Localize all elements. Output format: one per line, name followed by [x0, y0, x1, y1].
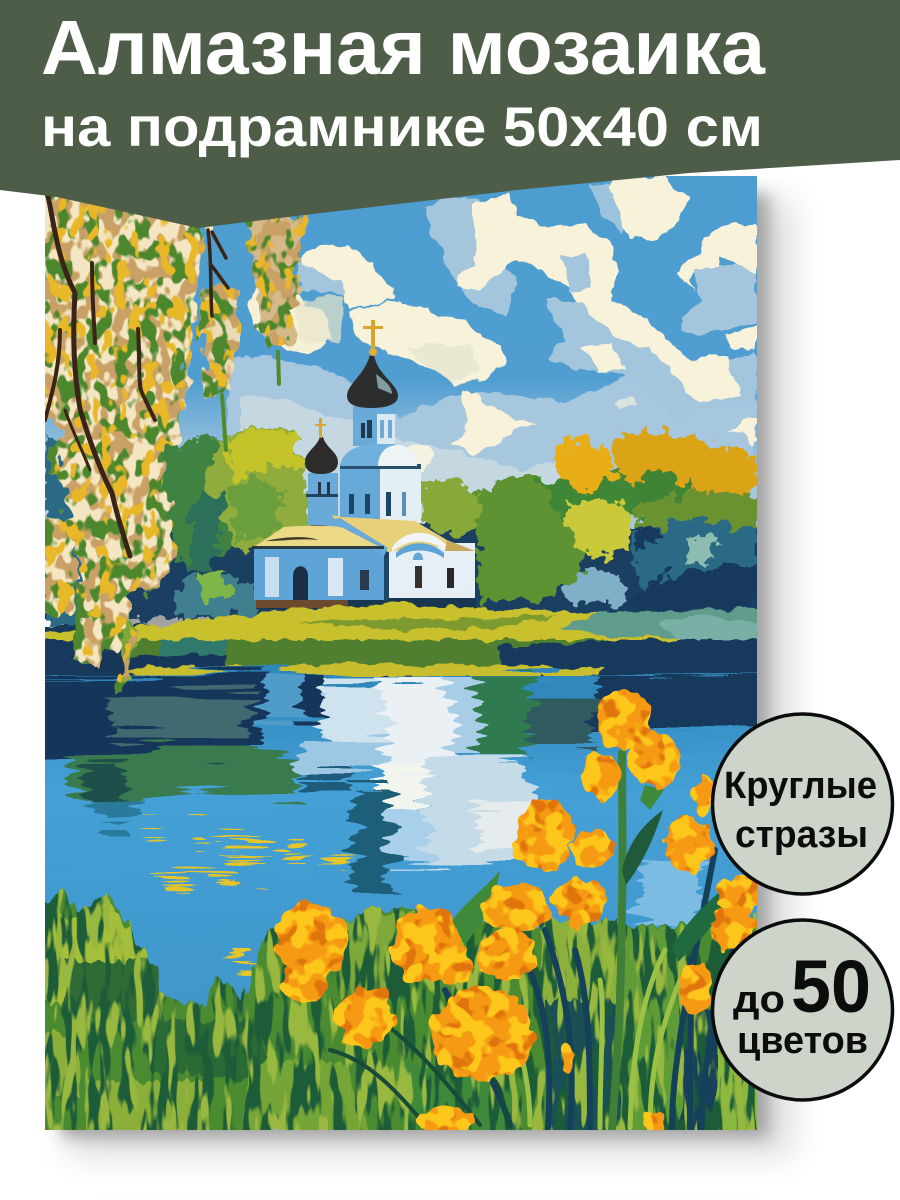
- lake with reflections: [30, 674, 770, 1014]
- badge: round rhinestones: [712, 714, 892, 894]
- badge: up to 50 colours: до: [733, 979, 785, 1021]
- clouds: [228, 176, 757, 530]
- yellow flowers: [274, 690, 760, 1134]
- title line 1: Алмазная мозаика: [41, 5, 766, 91]
- meadow and far bank: [40, 603, 762, 685]
- dark branches: [45, 196, 279, 556]
- background tree line: [40, 428, 762, 626]
- badge: round rhinestones: Круглые: [724, 765, 877, 807]
- badge: round rhinestones: стразы: [735, 814, 868, 856]
- canvas drop shadow: [62, 194, 792, 1155]
- badge: up to 50 colours: цветов: [737, 1020, 868, 1062]
- weeping willow branches: [35, 180, 302, 695]
- iris stems and blades: [330, 753, 740, 1130]
- blossom masses: [35, 180, 302, 695]
- badge: up to 50 colours: [712, 920, 892, 1100]
- sky: [45, 176, 757, 546]
- church: [252, 320, 476, 609]
- foreground grass: [40, 890, 762, 1135]
- badge: up to 50 colours: 50: [791, 945, 871, 1028]
- header banner: [0, 0, 900, 228]
- painting: church by the lake: [30, 176, 770, 1135]
- title line 2: на подрамнике 50х40 см: [41, 95, 763, 158]
